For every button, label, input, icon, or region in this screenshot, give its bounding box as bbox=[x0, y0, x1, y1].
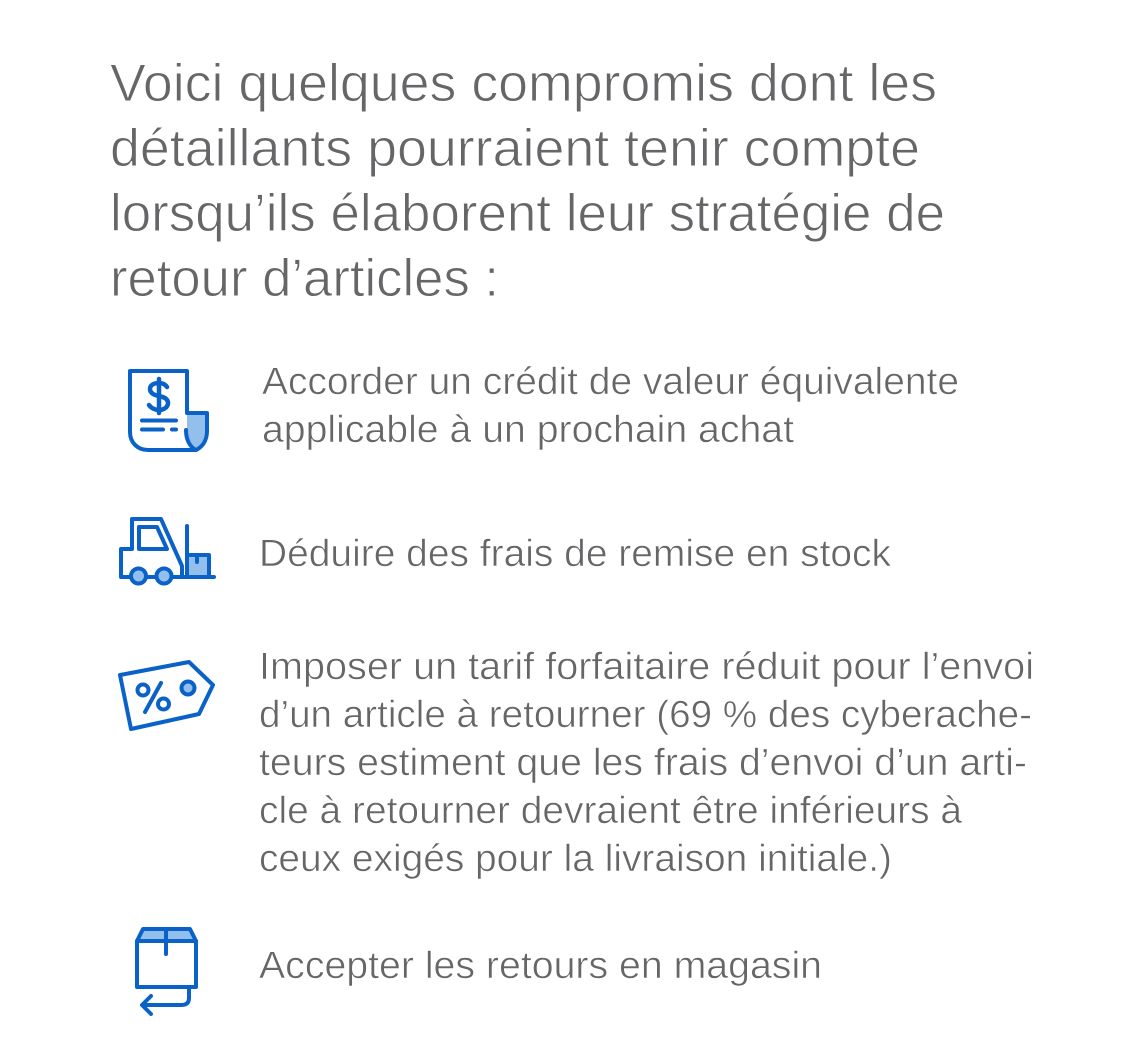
text: reduced flat rate: teurs estiment que les frais d’envoi d’un arti- bbox=[259, 742, 1027, 784]
title: retour d’articles : bbox=[110, 249, 499, 308]
text: restocking fee: Déduire des frais de remise en stock bbox=[259, 533, 892, 575]
text: store credit bbox=[262, 361, 959, 451]
text: reduced flat rate: ceux exigés pour la livraison initiale.) bbox=[259, 838, 892, 880]
icon: invoice with dollar sign bbox=[130, 371, 207, 450]
title: détaillants pourraient tenir compte bbox=[110, 119, 920, 178]
icon: percent price tag bbox=[120, 662, 213, 729]
title: lorsqu’ils élaborent leur stratégie de bbox=[110, 184, 945, 243]
icon: box with return arrow bbox=[137, 929, 196, 1014]
icon: forklift bbox=[121, 519, 214, 584]
text: reduced flat rate: cle à retourner devraient être inférieurs à bbox=[259, 790, 963, 832]
title bbox=[110, 54, 945, 308]
text: reduced flat rate: Imposer un tarif forfaitaire réduit pour l’envoi bbox=[259, 646, 1034, 688]
text: store credit: Accorder un crédit de valeur équivalente bbox=[262, 361, 959, 403]
text: in-store returns: Accepter les retours en magasin bbox=[259, 945, 822, 987]
text: reduced flat rate: d’un article à retourner (69 % des cyberache- bbox=[259, 694, 1032, 736]
title: Voici quelques compromis dont les bbox=[110, 54, 937, 113]
text: reduced flat rate bbox=[259, 646, 1034, 880]
text: store credit: applicable à un prochain achat bbox=[262, 409, 794, 451]
